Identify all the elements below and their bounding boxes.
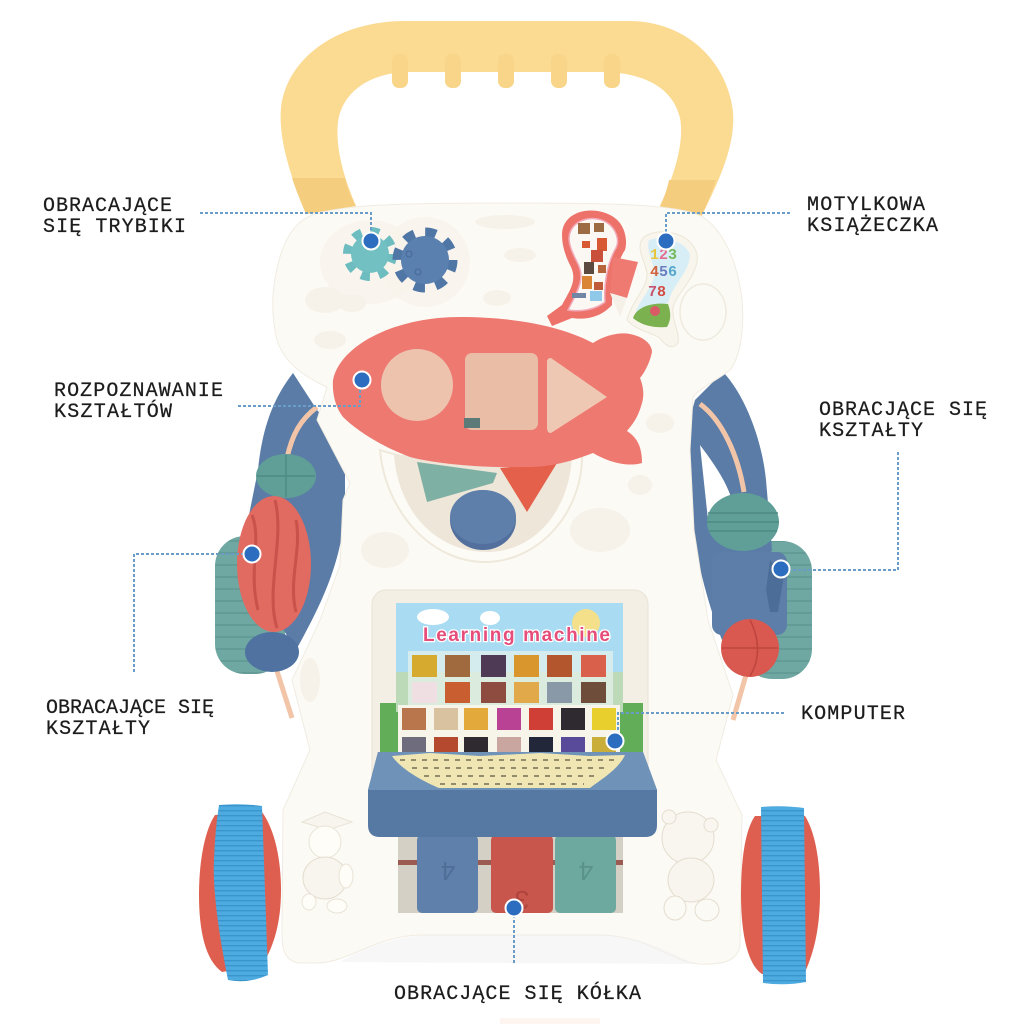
panel relief shapes bbox=[300, 215, 726, 702]
number rollers: 4 bbox=[441, 856, 455, 886]
callout: butterfly book: KSIĄŻECZKA bbox=[807, 215, 938, 238]
callout: gears bbox=[43, 195, 380, 250]
computer recess bbox=[372, 590, 648, 790]
sorter cavity bbox=[380, 450, 582, 562]
left blue arm bbox=[240, 373, 345, 718]
callout: butterfly book: MOTYLKOWA bbox=[807, 194, 925, 217]
right rear wheel bbox=[741, 806, 820, 984]
callout: computer bbox=[606, 703, 905, 750]
turtle relief bbox=[302, 812, 353, 913]
butterfly book: animal panel bbox=[547, 211, 626, 326]
floor shadow bbox=[340, 935, 695, 964]
right teal side wheel bbox=[742, 541, 812, 679]
learning machine screen: Learning machine bbox=[423, 625, 610, 646]
callout: butterfly book bbox=[658, 194, 938, 250]
keyboard tray bbox=[368, 752, 657, 837]
callout: rotating shapes left: OBRACAJĄCE SIĘ bbox=[46, 697, 214, 720]
callout: rotating shapes right bbox=[772, 399, 987, 578]
butterfly book: number panel: 456 bbox=[650, 264, 677, 281]
walker body bbox=[273, 203, 743, 964]
faint bottom tint bbox=[500, 1018, 600, 1024]
number rollers: 4 bbox=[579, 856, 593, 886]
left rear wheel bbox=[199, 804, 281, 981]
right beads bbox=[707, 493, 787, 677]
gears bbox=[348, 232, 452, 287]
callout: computer: KOMPUTER bbox=[801, 703, 905, 726]
left beads bbox=[237, 454, 316, 672]
callout: gears: OBRACAJĄCE bbox=[43, 195, 172, 218]
number rollers bbox=[398, 835, 623, 915]
callout: rotating shapes right: OBRACJĄCE SIĘ bbox=[819, 399, 987, 422]
tiger relief bbox=[662, 810, 719, 921]
number rollers: 3 bbox=[515, 885, 529, 915]
callout: shapes recognition bbox=[54, 372, 370, 424]
butterfly book: number panel bbox=[627, 232, 697, 347]
callout: gears: SIĘ TRYBIKI bbox=[43, 216, 186, 239]
callout: rotating shapes left bbox=[46, 546, 260, 741]
callout: rotating shapes right: KSZTAŁTY bbox=[819, 420, 923, 443]
handle bbox=[281, 21, 733, 226]
left teal side wheel bbox=[215, 536, 285, 674]
callout: rotating wheels bbox=[394, 900, 641, 1006]
crayon bbox=[610, 257, 638, 317]
callout: rotating wheels: OBRACJĄCE SIĘ KÓŁKA bbox=[394, 982, 641, 1006]
learning machine screen bbox=[380, 603, 643, 755]
callout: rotating shapes left: KSZTAŁTY bbox=[46, 718, 150, 741]
butterfly book: number panel: 123 bbox=[650, 247, 677, 264]
shape sorter plane bbox=[333, 317, 652, 467]
callout: shapes recognition: KSZTAŁTÓW bbox=[54, 400, 172, 424]
right blue arm bbox=[684, 372, 772, 720]
callout: shapes recognition: ROZPOZNAWANIE bbox=[54, 380, 223, 403]
butterfly book: number panel: 78 bbox=[648, 284, 666, 301]
